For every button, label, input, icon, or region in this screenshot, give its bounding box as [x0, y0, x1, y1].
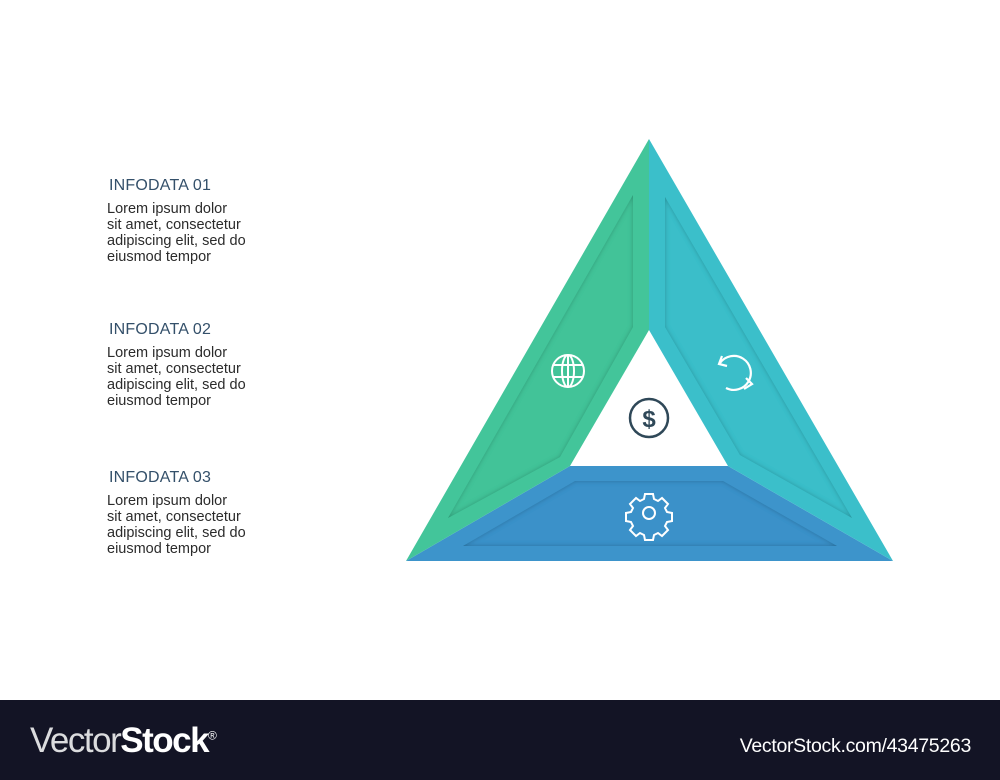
text block: infodata 01: Lorem ipsum dolor	[107, 201, 227, 217]
icon: globe	[552, 355, 584, 387]
text block: infodata 02: INFODATA 02	[109, 321, 211, 338]
text block: infodata 03: INFODATA 03	[109, 469, 211, 486]
piece: green left	[406, 139, 649, 561]
text block: infodata 02: Lorem ipsum dolor	[107, 345, 227, 361]
text block: infodata 01: INFODATA 01	[109, 177, 211, 194]
footer	[0, 700, 1000, 780]
icon: gear	[626, 494, 672, 540]
icon: dollar	[630, 399, 668, 437]
icon: dollar: $	[642, 406, 656, 433]
footer logo: VectorStock®	[30, 721, 215, 760]
text block: infodata 01: eiusmod tempor	[107, 249, 211, 265]
text block: infodata 02: eiusmod tempor	[107, 393, 211, 409]
text block: infodata 03: adipiscing elit, sed do	[107, 525, 246, 541]
text block: infodata 02: adipiscing elit, sed do	[107, 377, 246, 393]
footer url: VectorStock.com/43475263	[740, 735, 971, 757]
icon: refresh	[719, 356, 752, 390]
text block: infodata 03: Lorem ipsum dolor	[107, 493, 227, 509]
piece: teal right	[649, 139, 893, 561]
text block: infodata 03	[107, 469, 246, 557]
text block: infodata 01	[107, 177, 246, 265]
text block: infodata 02	[107, 321, 246, 409]
text block: infodata 01: adipiscing elit, sed do	[107, 233, 246, 249]
text block: infodata 03: eiusmod tempor	[107, 541, 211, 557]
text block: infodata 02: sit amet, consectetur	[107, 361, 241, 377]
text block: infodata 01: sit amet, consectetur	[107, 217, 241, 233]
text block: infodata 03: sit amet, consectetur	[107, 509, 241, 525]
piece: blue bottom	[406, 466, 893, 561]
